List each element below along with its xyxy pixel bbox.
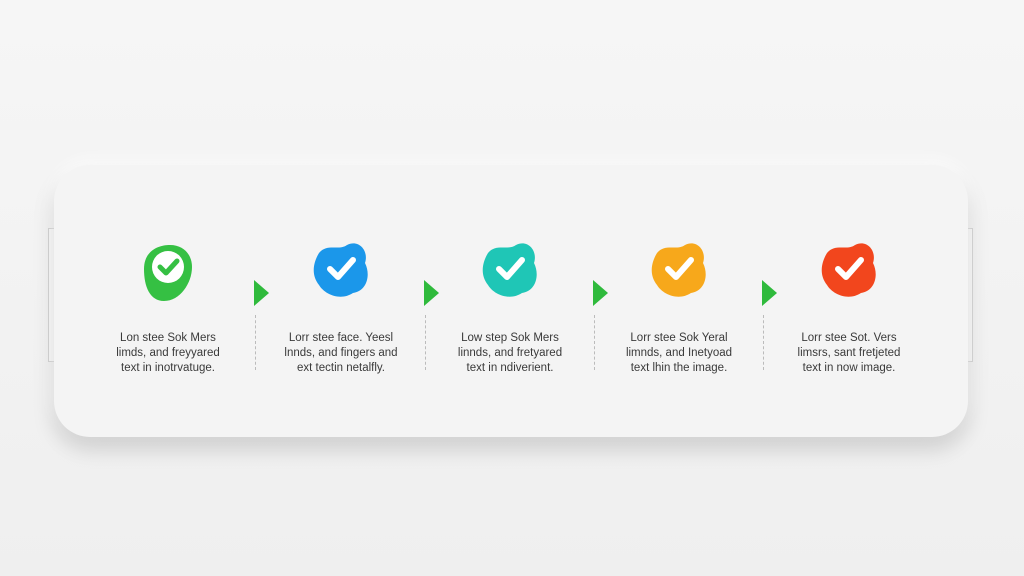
step 2 icon: blue check <box>314 243 368 297</box>
step 4 text: limnds, and Inetyoad <box>626 347 732 359</box>
step 2 text <box>284 332 398 374</box>
step 3 icon: teal check <box>482 243 537 297</box>
step 1 text <box>116 332 220 374</box>
step 3 text: linnds, and fretyared <box>458 347 562 359</box>
arrow 1 <box>254 280 269 306</box>
panel: process card <box>54 165 968 437</box>
step 5 text: text in now image. <box>803 362 895 374</box>
step 5 icon: red check <box>822 243 876 297</box>
step 4 icon: orange check <box>652 243 706 297</box>
arrow 2 <box>424 280 439 306</box>
arrow 4 <box>762 280 777 306</box>
step 4 text <box>626 332 732 374</box>
step 5 text: limsrs, sant fretjeted <box>798 347 900 359</box>
step 2 text: lnnds, and fingers and <box>284 347 398 359</box>
step 2 text: Lorr stee face. Yeesl <box>289 332 393 344</box>
step 5 text <box>798 332 900 374</box>
step 1 text: Lon stee Sok Mers <box>120 332 216 344</box>
step 1 text: limds, and freyyared <box>116 347 220 359</box>
step 4 text: text lhin the image. <box>631 362 727 374</box>
step 1 text: text in inotrvatuge. <box>121 362 215 374</box>
step 4 text: Lorr stee Sok Yeral <box>630 332 728 344</box>
step 5 text: Lorr stee Sot. Vers <box>801 332 897 344</box>
step 2 text: ext tectin netalfly. <box>297 362 385 374</box>
step 3 text: text in ndiverient. <box>467 362 553 374</box>
arrow 3 <box>593 280 608 306</box>
right bracket <box>966 228 973 362</box>
left bracket <box>48 228 55 362</box>
step 3 text <box>458 332 562 374</box>
step 1 icon: green check <box>144 245 192 301</box>
step 3 text: Low step Sok Mers <box>461 332 559 344</box>
